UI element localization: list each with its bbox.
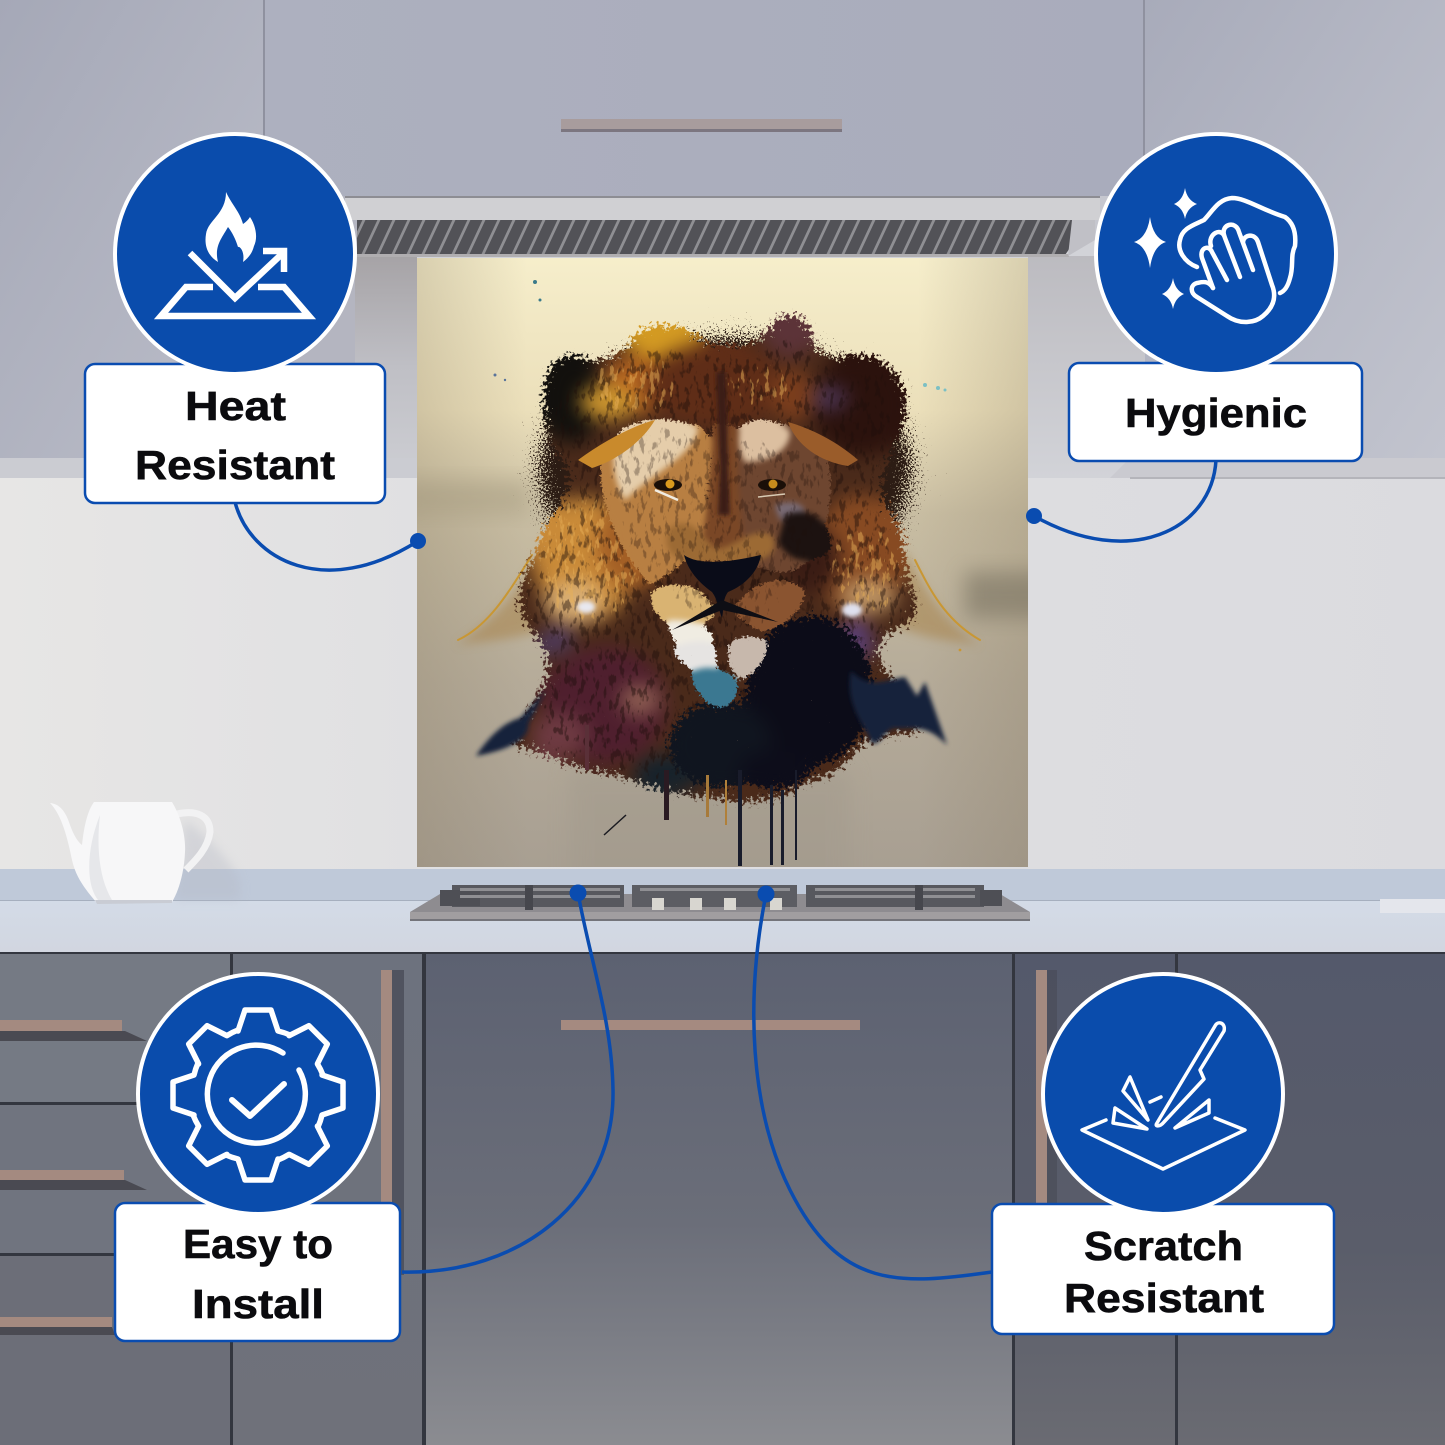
nose and mouth (684, 555, 761, 618)
label box (1069, 363, 1362, 461)
gas hob (410, 885, 1030, 921)
dark fur grain (518, 330, 920, 785)
cabinet handles (0, 1031, 147, 1041)
label box (85, 364, 385, 503)
face grain (610, 428, 823, 626)
badge circle (1096, 134, 1336, 374)
connector: scratch resistant (754, 886, 992, 1279)
white patches (577, 601, 595, 613)
dark lower mane (668, 614, 874, 790)
coloured specks (494, 280, 961, 651)
mane mass (505, 313, 925, 803)
connector: hygienic (1026, 460, 1216, 541)
reflection shadows (400, 480, 530, 514)
light fur grain (532, 350, 907, 630)
navy splashes (476, 671, 947, 756)
paint drips (585, 725, 797, 866)
badge circle (115, 134, 355, 374)
callout: hygienic (1069, 134, 1362, 461)
label box (992, 1204, 1334, 1334)
backsplash wall (0, 478, 1445, 873)
countertop (0, 869, 1445, 901)
heading: Scratch (1084, 1223, 1243, 1269)
forehead centre line (716, 372, 730, 515)
eyes (654, 479, 682, 491)
label box (115, 1203, 400, 1341)
heading: Hygienic (1125, 390, 1307, 436)
badge circle (138, 974, 378, 1214)
splatter dust (540, 340, 910, 600)
icon: hand wiping with sparkles (1134, 188, 1295, 322)
upper cabinets (0, 0, 263, 458)
badge circle (1043, 974, 1283, 1214)
connector: heat resistant (235, 502, 426, 570)
top handle (561, 119, 842, 131)
icon: gear with check (173, 1010, 343, 1180)
heading line 2: Resistant (1064, 1275, 1264, 1321)
cooker hood (345, 197, 1100, 220)
icon: knife scratching surface (1082, 1023, 1245, 1169)
lower cabinets (0, 952, 1445, 1445)
callout: easy to install (115, 974, 400, 1341)
heading: Easy to (183, 1221, 333, 1267)
heading line 2: Install (192, 1281, 324, 1327)
panel: lion splashback (417, 258, 1028, 867)
icon: flame and arrow on surface (161, 192, 309, 316)
callout: scratch resistant (992, 974, 1334, 1334)
connector: easy to install (402, 884, 613, 1272)
golden hair wisps (456, 550, 980, 645)
heading: Heat (185, 383, 286, 429)
ear tufts (578, 420, 655, 468)
lion face (577, 372, 862, 708)
callout: heat resistant (85, 134, 385, 503)
teapot (50, 802, 240, 904)
heading line 2: Resistant (135, 442, 335, 488)
